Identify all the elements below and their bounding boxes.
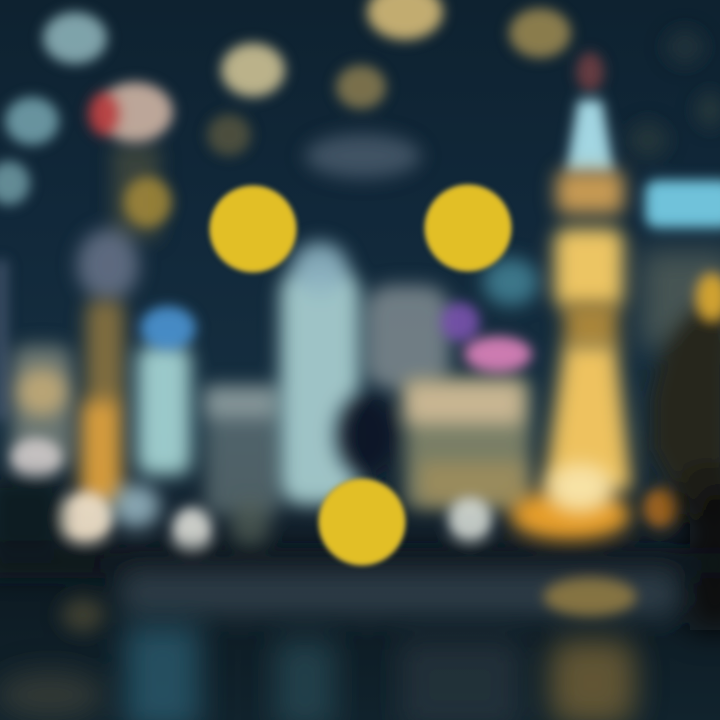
group: central buildings [205,242,532,551]
group: right edge sign and silhouette [640,180,720,630]
icon: yellow circle right [425,185,511,271]
group: glowing tower on the right [510,52,677,541]
icon: yellow circle left [210,186,296,272]
group: left towers [0,82,212,553]
icon: yellow circle bottom [319,479,405,565]
group: bokeh lights in the sky [0,0,720,306]
group: street and water reflections [0,480,720,720]
